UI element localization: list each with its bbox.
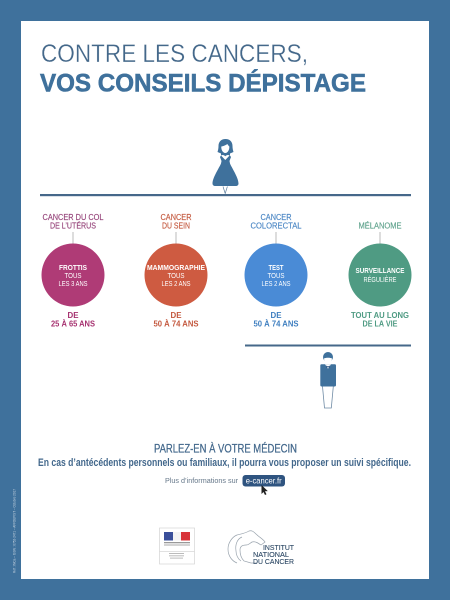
top timeline line (40, 194, 411, 196)
more information line: Plus d’informations sur (165, 478, 239, 485)
heading (160, 212, 192, 230)
column: cancer colorectal (244, 212, 308, 328)
connector (380, 232, 381, 244)
logo: Institut National du Cancer: NATIONAL (253, 550, 289, 559)
circle (348, 244, 412, 306)
icon: cursor (262, 485, 268, 495)
column: cancer du col de l'utérus (42, 212, 104, 328)
age range: DE (68, 310, 79, 320)
circle text: TOUS (168, 271, 185, 280)
circle text: LES 2 ANS (162, 279, 191, 288)
age range (254, 310, 299, 328)
circle text: LES 3 ANS (58, 279, 88, 288)
title line 2: VOS CONSEILS DÉPISTAGE (40, 68, 366, 98)
age range: TOUT AU LONG (351, 310, 409, 320)
heading: DU SEIN (162, 220, 190, 230)
heading (250, 212, 302, 230)
icon: woman (212, 139, 238, 194)
circle text: TOUS (64, 271, 82, 280)
connector (176, 232, 177, 244)
age range: DE LA VIE (362, 318, 398, 328)
age range: 25 À 65 ANS (51, 318, 95, 328)
heading (42, 212, 104, 230)
circle (42, 244, 104, 306)
age range: 50 À 74 ANS (254, 318, 299, 328)
column: cancer du sein (144, 212, 208, 328)
heading: COLORECTAL (250, 220, 302, 230)
heading: CANCER (160, 212, 192, 222)
circle (144, 244, 208, 306)
age range (154, 310, 199, 328)
circle text (58, 263, 88, 288)
bottom timeline line (245, 344, 411, 346)
connector (276, 232, 277, 244)
circle text: MAMMOGRAPHIE (147, 263, 205, 272)
logo: Institut National du Cancer: DU CANCER (253, 557, 295, 566)
circle text: SURVEILLANCE (356, 266, 405, 275)
circle text (262, 263, 291, 288)
website button: e-cancer.fr (246, 476, 282, 486)
logo: Institut National du Cancer: INSTITUT (263, 543, 294, 552)
circle text: LES 2 ANS (262, 279, 291, 288)
age range (51, 310, 95, 328)
age range: DE (170, 310, 182, 320)
column: mélanome (348, 220, 412, 328)
connector (72, 232, 74, 244)
legal reference text: Réf : INCa – ISSN : 0752-2471 – AFFDEPIST – Octobre 2017 (12, 489, 16, 573)
circle text (356, 266, 405, 284)
circle text: FROTTIS (59, 263, 87, 272)
heading: MÉLANOME (358, 220, 402, 230)
circle text: TEST (268, 263, 284, 272)
title (40, 40, 366, 98)
heading: CANCER (260, 212, 292, 222)
age range: 50 À 74 ANS (154, 318, 199, 328)
logo: Institut National du Cancer (228, 531, 295, 566)
call to action heading: PARLEZ-EN À VOTRE MÉDECIN (154, 441, 297, 456)
title line 1: CONTRE LES CANCERS, (41, 40, 308, 68)
circle text (147, 263, 205, 288)
circle text: RÉGULIÈRE (364, 275, 397, 284)
icon: man (320, 352, 336, 408)
heading: DE L’UTÉRUS (50, 220, 96, 230)
age range (351, 310, 409, 328)
circle text: TOUS (268, 271, 285, 280)
logo: French Republic ministry (160, 528, 194, 564)
age range: DE (270, 310, 282, 320)
circle (244, 244, 308, 306)
heading: CANCER DU COL (42, 212, 104, 222)
